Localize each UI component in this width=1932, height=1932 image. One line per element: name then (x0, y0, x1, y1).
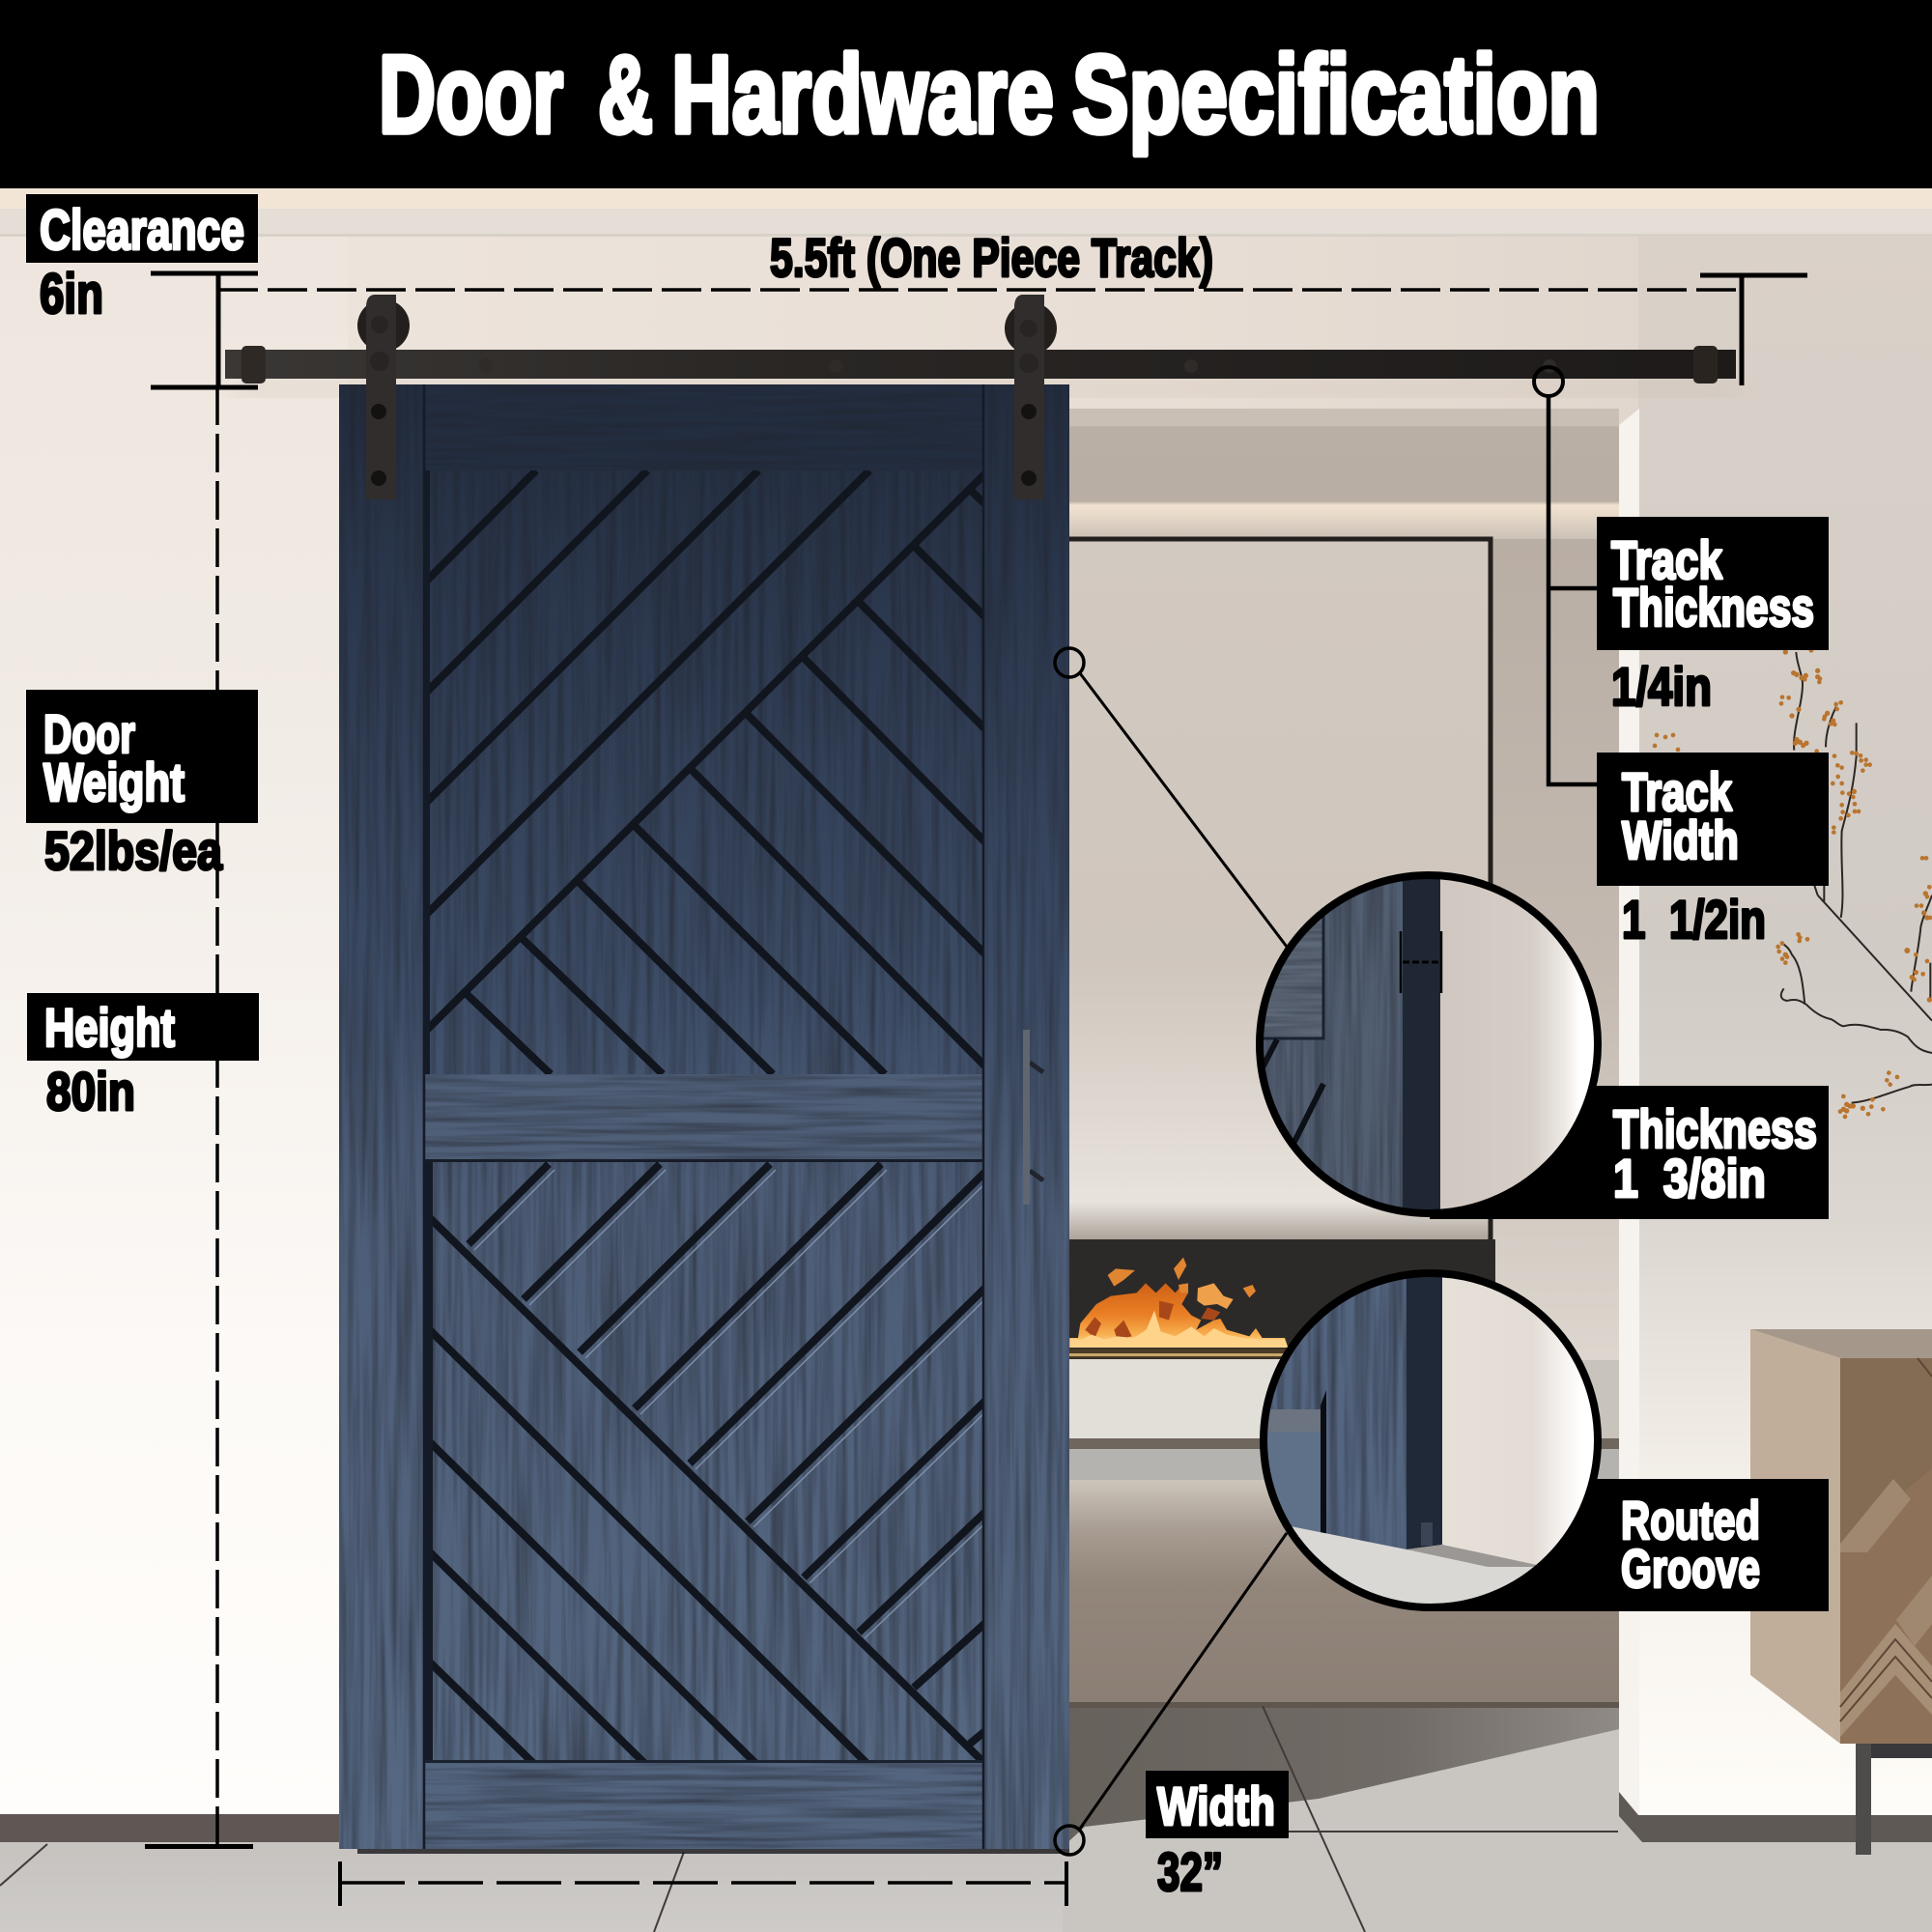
stile seams (424, 384, 983, 1849)
lower panel grain (425, 1160, 983, 1763)
track rail (225, 350, 1736, 379)
door edge (1403, 869, 1440, 1219)
door bottom shadow (357, 1849, 1069, 1854)
leader: door corner marker to routed groove detail (1055, 1533, 1287, 1855)
height label box (27, 993, 259, 1061)
floor tile lines (0, 1706, 1618, 1932)
width label box (1146, 1771, 1289, 1838)
panel grooves (1262, 1039, 1323, 1146)
width label: Width (1157, 1776, 1275, 1836)
left skirting (0, 1814, 348, 1842)
opening soffit with light strip (1063, 409, 1619, 539)
door width dimension (340, 1771, 1289, 1906)
circle outline (1264, 1273, 1598, 1607)
bottom rail (425, 1760, 983, 1849)
panel close-up (1267, 1432, 1321, 1532)
height value: 80in (46, 1061, 135, 1122)
track shadow on wall (232, 382, 1734, 395)
barn door (339, 384, 1069, 1854)
routed groove label second line: Groove (1621, 1538, 1760, 1599)
thickness label: Thickness (1613, 1098, 1817, 1159)
chevron relief (1840, 1624, 1932, 1737)
right relief band (1896, 1576, 1932, 1646)
height dashed line (215, 386, 219, 1847)
door weight box (26, 690, 258, 823)
track thickness value: 1/4in (1611, 656, 1712, 717)
routed groove callout (1430, 1479, 1829, 1611)
rug (1063, 1480, 1619, 1706)
cabinet side (1750, 1329, 1840, 1744)
height foot bar (145, 1844, 253, 1849)
track length label: 5.5ft (One Piece Track) (770, 227, 1213, 288)
routed notch (1421, 1522, 1433, 1546)
upper wall and moulding (0, 188, 1932, 430)
door rail close-up (1264, 919, 1321, 1037)
door jamb (1619, 409, 1639, 1821)
track thickness label second line: Thickness (1613, 577, 1814, 638)
track width box (1597, 753, 1829, 886)
opening inner side wall (1492, 539, 1619, 1370)
clearance dimension (26, 194, 258, 387)
track thickness callout (1597, 517, 1829, 717)
door edge (1406, 1265, 1442, 1550)
flames (1069, 1258, 1288, 1348)
track length right bracket (1700, 275, 1807, 385)
side ledge (1493, 1360, 1619, 1438)
door slab (339, 384, 1069, 1849)
track width label: Track (1622, 761, 1733, 822)
right stile grain (983, 384, 1069, 1849)
thickness dimension mark (1401, 931, 1441, 993)
track mounting bolts (479, 358, 1556, 373)
track thickness box (1597, 517, 1829, 650)
door weight callout (26, 690, 258, 881)
stone hearth (1063, 1359, 1493, 1438)
door weight label: Door (43, 703, 135, 764)
title: Door (379, 34, 563, 156)
fireplace (1063, 1239, 1495, 1359)
thickness value: 1 3/8in (1613, 1148, 1766, 1208)
width value: 32” (1157, 1841, 1223, 1902)
rug edge (1063, 1702, 1619, 1708)
back floor (1063, 1449, 1619, 1480)
wall behind door edge (1440, 891, 1594, 1209)
track width callout (1597, 753, 1829, 950)
header banner (0, 0, 1932, 188)
door height dimension (27, 386, 259, 1849)
cabinet (1750, 1329, 1932, 1855)
detail circle: routed groove (1256, 1265, 1613, 1623)
berries (1653, 648, 1932, 1119)
groove line (1321, 1390, 1326, 1533)
main branch stems (1780, 652, 1932, 1103)
track thickness and width leader (1534, 367, 1597, 784)
door handle (1023, 1030, 1043, 1205)
floor shadow (1063, 1708, 1619, 1847)
leader: door edge marker to thickness detail (1055, 648, 1287, 947)
title: Specification (1072, 34, 1600, 156)
clearance value: 6in (40, 263, 103, 326)
thickness box (1430, 1086, 1829, 1219)
panel shadow (1264, 916, 1325, 1039)
opening inner back wall (1063, 539, 1492, 1244)
track width label second line: Width (1622, 810, 1739, 870)
right skirting (1619, 1792, 1932, 1842)
track thickness label: Track (1611, 529, 1723, 590)
cabinet top (1750, 1329, 1932, 1358)
decorative berry branches on right wall (1653, 648, 1932, 1119)
cabinet cross bar (1860, 1744, 1932, 1758)
title (379, 34, 1600, 156)
door stile close-up (1270, 1279, 1406, 1549)
lower panel grooves (421, 1160, 991, 1766)
black frame line (1063, 539, 1491, 1246)
door weight label second line: Weight (43, 752, 185, 812)
cabinet leg (1856, 1744, 1871, 1855)
thickness callout (1430, 1086, 1829, 1219)
top rail (425, 384, 983, 470)
floor (1256, 1519, 1613, 1623)
title: & (598, 34, 653, 156)
left stopper (242, 346, 266, 384)
left hanger roller (357, 295, 410, 499)
detail circle: door thickness (1251, 869, 1605, 1219)
width dashed line (340, 1881, 1066, 1885)
clearance bracket (151, 273, 258, 387)
front shading (1840, 1358, 1932, 1546)
rail close-up (1267, 1409, 1321, 1432)
right hanger roller (1005, 295, 1057, 499)
cabinet front (1840, 1358, 1932, 1744)
title: Hardware (671, 34, 1054, 156)
sliding track (225, 346, 1736, 384)
door weight value: 52lbs/ea (44, 820, 223, 881)
base strip (1063, 1438, 1619, 1449)
front floor (0, 1840, 1932, 1932)
left wall (0, 237, 348, 1821)
circle outline (1260, 875, 1598, 1213)
upper panel grooves (421, 470, 985, 1074)
track length dashed line (218, 288, 1741, 292)
wall behind door (1442, 1277, 1594, 1565)
right wall (1638, 237, 1932, 1821)
routed groove box (1430, 1479, 1829, 1611)
door stile close-up (1264, 881, 1403, 1208)
height label: Height (44, 997, 175, 1058)
routed groove label: Routed (1621, 1490, 1760, 1550)
floor shadow (1406, 1545, 1546, 1567)
upper relief band (1840, 1479, 1911, 1552)
upper panel grain (425, 470, 983, 1074)
track length dimension (218, 227, 1807, 385)
left stile grain (339, 384, 424, 1849)
middle rail (425, 1074, 983, 1162)
clearance label box (26, 194, 258, 263)
track width value: 1 1/2in (1622, 889, 1766, 950)
floor right of door (1063, 1708, 1932, 1932)
clearance label: Clearance (40, 199, 244, 262)
right stopper (1693, 346, 1718, 384)
